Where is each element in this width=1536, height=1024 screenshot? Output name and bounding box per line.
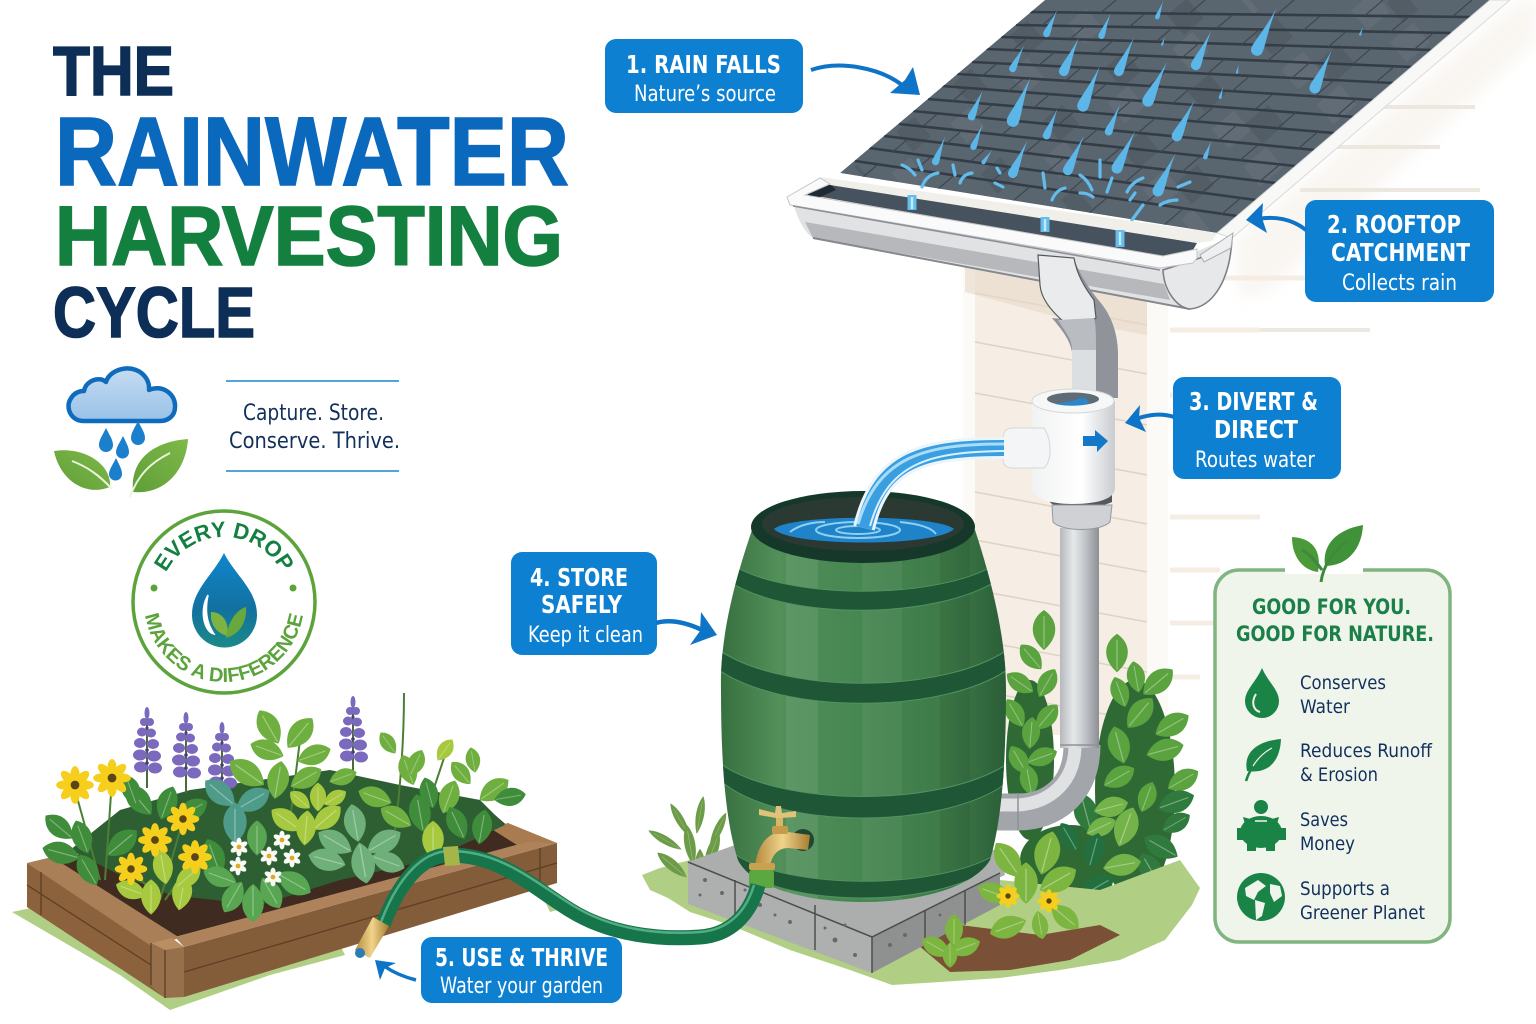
icon: sprout (1292, 525, 1363, 582)
callout 4: store safely: 4. STORE (530, 563, 628, 592)
roof shingles (840, 0, 1490, 233)
callout 4: store safely (511, 552, 657, 655)
grass around barrel (642, 860, 1200, 985)
shrub behind barrel (999, 610, 1203, 906)
callout 3: divert and direct (1173, 377, 1341, 479)
callout 1: rain falls: 1. RAIN FALLS (626, 50, 781, 79)
panel heading: GOOD FOR YOU. (1252, 595, 1411, 619)
badge: every drop makes a difference (131, 509, 317, 695)
splashes (902, 160, 1190, 220)
panel: good for you, good for nature (1215, 525, 1450, 942)
plant in front of pavers (918, 828, 1085, 968)
fern left of barrel (646, 795, 735, 890)
gutter (787, 177, 1233, 309)
benefit: saves money: Saves (1300, 809, 1348, 831)
wall and siding (963, 0, 1536, 735)
callout 1: rain falls: Nature’s source (634, 82, 776, 107)
tagline: Capture. Store. (243, 401, 384, 426)
icon: cloud with rain and leaves (54, 368, 188, 497)
roof fascia (1217, 0, 1510, 238)
title: RAINWATER (55, 97, 569, 206)
benefit: reduces runoff: Reduces Runoff (1300, 740, 1433, 762)
title (53, 32, 569, 353)
panel heading (1236, 595, 1434, 646)
benefit: conserves water (1245, 668, 1386, 718)
tap (749, 806, 814, 888)
callout 1: rain falls (605, 39, 803, 113)
garden plants (39, 693, 527, 922)
callout 4: store safely: SAFELY (541, 590, 623, 619)
callout 5: use and thrive (421, 937, 622, 1003)
arrow: rooftop catchment (1246, 203, 1306, 233)
benefit: saves money: Money (1300, 833, 1355, 855)
arrow: store (656, 612, 717, 645)
title: CYCLE (53, 274, 255, 353)
lower downspout (994, 505, 1112, 830)
title: THE (53, 32, 174, 110)
arrow: use (375, 960, 416, 980)
callout 5: use and thrive: 5. USE & THRIVE (435, 943, 608, 972)
callout 5: use and thrive: Water your garden (440, 974, 603, 999)
tagline (226, 381, 400, 471)
water streams over gutter (912, 195, 1120, 247)
benefit: saves money (1237, 800, 1355, 855)
title: HARVESTING (55, 189, 563, 283)
benefit: conserves water: Conserves (1300, 672, 1386, 694)
callout 2: rooftop catchment (1305, 200, 1494, 302)
callout 3: divert and direct: DIRECT (1214, 415, 1298, 444)
badge: every drop makes a difference: EVERY DROP (154, 522, 293, 572)
tagline: Conserve. Thrive. (229, 429, 400, 454)
benefit: conserves water: Water (1300, 696, 1350, 718)
callout 2: rooftop catchment: CATCHMENT (1331, 238, 1470, 267)
benefit: greener planet (1237, 873, 1425, 924)
pouring pipe (858, 444, 1004, 528)
raindrops (931, 0, 1364, 198)
garden hose (355, 846, 758, 958)
callout 3: divert and direct: 3. DIVERT & (1189, 387, 1318, 416)
callout 2: rooftop catchment: Collects rain (1342, 271, 1457, 296)
benefit: greener planet: Supports a (1300, 878, 1390, 900)
arrow: rain falls to roof (811, 66, 920, 95)
arrow: divert (1125, 405, 1174, 432)
diverter (1003, 389, 1115, 508)
rain barrel (716, 491, 1010, 902)
callout 4: store safely: Keep it clean (528, 623, 643, 648)
concrete pavers (688, 845, 1005, 973)
badge: every drop makes a difference: MAKES A DIFFERENCE (145, 612, 303, 682)
benefit: reduces runoff (1246, 739, 1433, 786)
callout 2: rooftop catchment: 2. ROOFTOP (1327, 210, 1461, 239)
panel heading: GOOD FOR NATURE. (1236, 622, 1434, 646)
callout 3: divert and direct: Routes water (1195, 448, 1316, 473)
benefit: reduces runoff: & Erosion (1300, 764, 1378, 786)
raised garden bed (12, 790, 575, 1010)
benefit: greener planet: Greener Planet (1300, 902, 1425, 924)
downspout upper (1038, 255, 1118, 398)
